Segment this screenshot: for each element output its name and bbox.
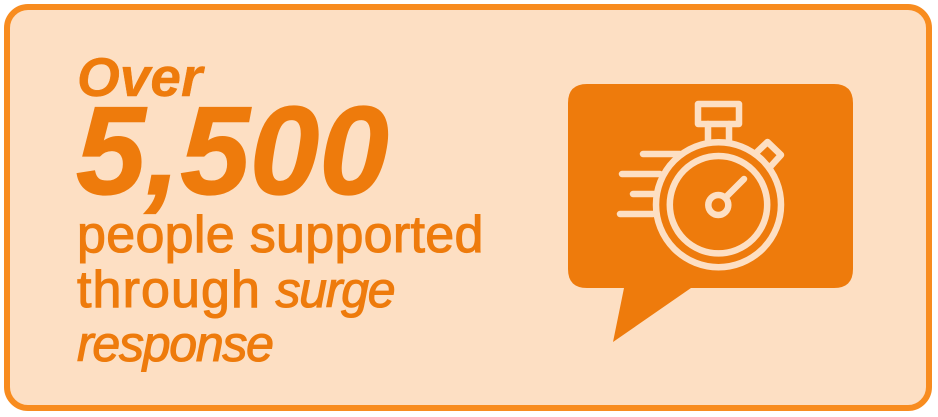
icon: stopwatch bbox=[620, 104, 781, 267]
text block: description bbox=[77, 206, 484, 372]
line: people supported: people supported bbox=[77, 206, 484, 264]
heading: Over: Over bbox=[77, 46, 202, 108]
line: response: response bbox=[77, 316, 273, 372]
big number: 5,500: 5,500 bbox=[76, 82, 389, 221]
line: through surge: through surge bbox=[77, 261, 394, 319]
speech bubble bbox=[568, 84, 853, 342]
